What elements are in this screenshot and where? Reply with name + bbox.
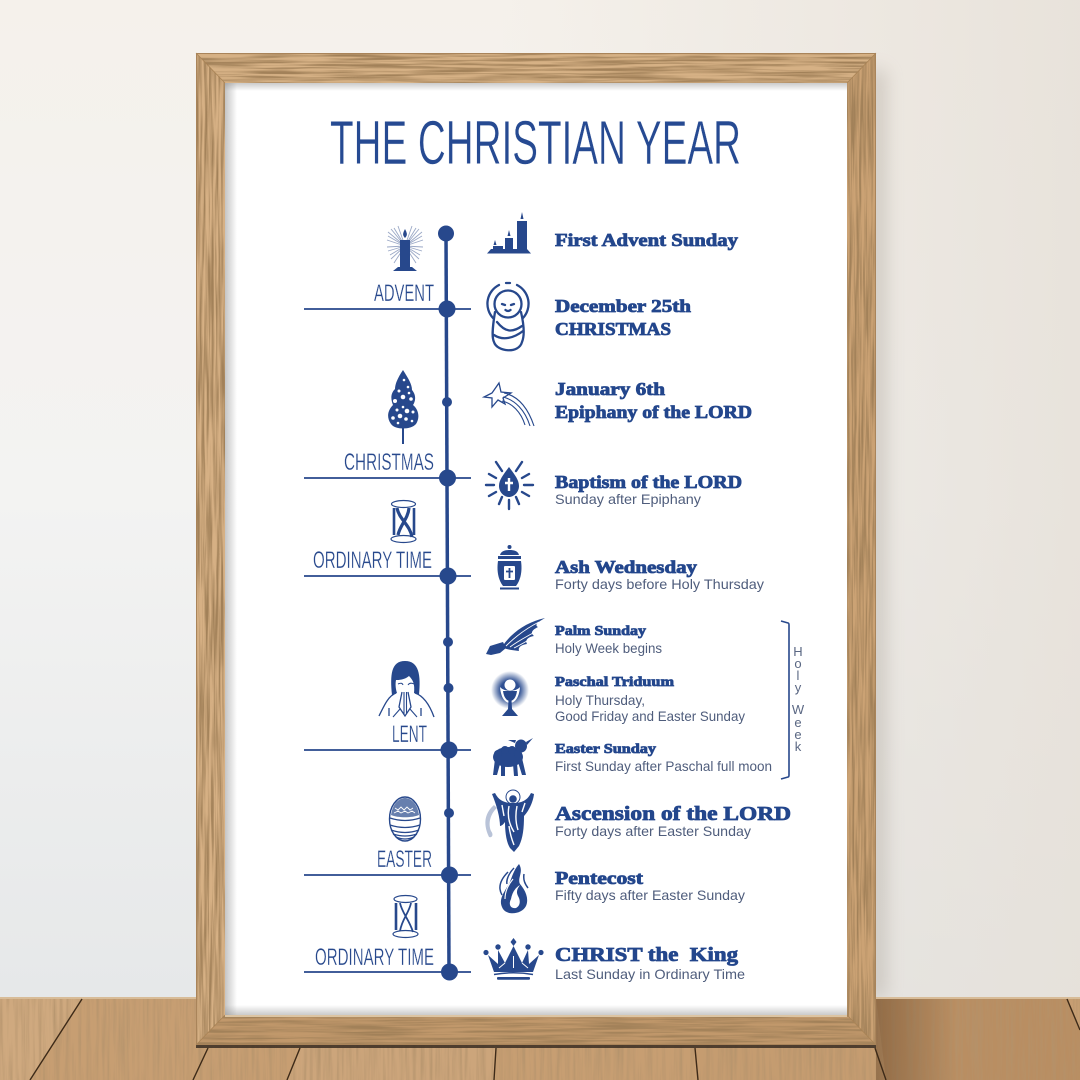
event text: advent and Christmas: Baptism of the LORD	[555, 472, 742, 492]
event text: Holy Week	[555, 624, 772, 774]
event text: Holy Week: Holy Week begins	[555, 640, 662, 656]
season labels: ADVENT	[374, 280, 434, 307]
timeline	[304, 226, 471, 980]
icon: palm branch	[486, 618, 545, 655]
icon: Pentecost flame	[500, 864, 528, 913]
icon: hourglass top	[391, 500, 416, 542]
event text: advent and Christmas: First Advent Sunday	[555, 230, 738, 250]
event text: advent and Christmas: January 6th	[555, 379, 665, 399]
season labels	[313, 280, 434, 971]
event text: Ash Wednesday: Ash Wednesday	[555, 557, 697, 577]
icon: praying woman	[379, 661, 434, 717]
icon: three candles	[487, 212, 531, 254]
event text: advent and Christmas: December 25th	[555, 296, 691, 316]
event text: Ascension: Forty days after Easter Sunday	[555, 823, 751, 839]
icon: shooting star	[484, 383, 534, 426]
Holy Week bracket: e	[794, 727, 802, 742]
icon: chalice	[491, 671, 529, 716]
icon: hourglass bottom	[393, 896, 418, 938]
event text: Holy Week: Holy Thursday,	[555, 692, 645, 708]
event text: Ascension: Ascension of the LORD	[555, 803, 791, 825]
wooden floor	[0, 997, 1080, 1080]
icon: crown	[483, 938, 544, 980]
Holy Week bracket: k	[795, 739, 802, 754]
event text: Holy Week: First Sunday after Paschal full moon	[555, 758, 772, 774]
icon: Christmas tree	[388, 370, 418, 444]
Holy Week bracket	[781, 621, 805, 779]
event text: advent and Christmas: Epiphany of the LORD	[555, 402, 752, 422]
event text: Ash Wednesday: Forty days before Holy Thursday	[555, 576, 764, 592]
season labels: CHRISTMAS	[344, 449, 434, 476]
event text: Holy Week: Good Friday and Easter Sunday	[555, 708, 745, 724]
event text: advent and Christmas: Sunday after Epiphany	[555, 491, 701, 507]
event text: Ascension	[555, 803, 791, 839]
Holy Week bracket: l	[797, 668, 800, 683]
icon: easter egg	[390, 797, 420, 841]
event text: Holy Week: Palm Sunday	[555, 624, 646, 639]
event text: Holy Week: Easter Sunday	[555, 742, 656, 757]
Holy Week bracket: o	[794, 656, 802, 671]
season labels: EASTER	[377, 846, 432, 873]
event text: advent and Christmas: CHRISTMAS	[555, 319, 671, 339]
Holy Week bracket: y	[795, 680, 802, 695]
event text: Christ the King	[555, 944, 745, 982]
icon: ash urn	[498, 545, 521, 590]
icon: lamb	[493, 738, 533, 776]
event text: Christ the King: CHRIST the King	[555, 944, 738, 966]
event text: Pentecost: Pentecost	[555, 868, 643, 888]
title: THE CHRISTIAN YEAR	[330, 109, 741, 178]
Holy Week bracket: H	[793, 644, 803, 659]
Holy Week bracket: W	[792, 702, 805, 717]
season labels: ORDINARY TIME	[315, 944, 434, 971]
event text: Christ the King: Last Sunday in Ordinary Time	[555, 966, 745, 982]
icon: advent candle	[387, 226, 423, 271]
event text: Ash Wednesday	[555, 557, 764, 592]
panel: white poster	[225, 83, 847, 1015]
icon: ascending Christ	[485, 790, 534, 852]
event text: Pentecost: Fifty days after Easter Sunday	[555, 887, 745, 903]
event text: Holy Week: Paschal Triduum	[555, 675, 674, 690]
Holy Week bracket: e	[794, 715, 802, 730]
season labels: ORDINARY TIME	[313, 547, 432, 574]
event text: advent and Christmas	[555, 230, 752, 507]
icon: baby Jesus	[487, 283, 529, 350]
icon: baptism drop	[486, 462, 533, 509]
season labels: LENT	[392, 721, 427, 748]
event text: Pentecost	[555, 868, 745, 903]
wooden frame	[196, 53, 876, 1045]
